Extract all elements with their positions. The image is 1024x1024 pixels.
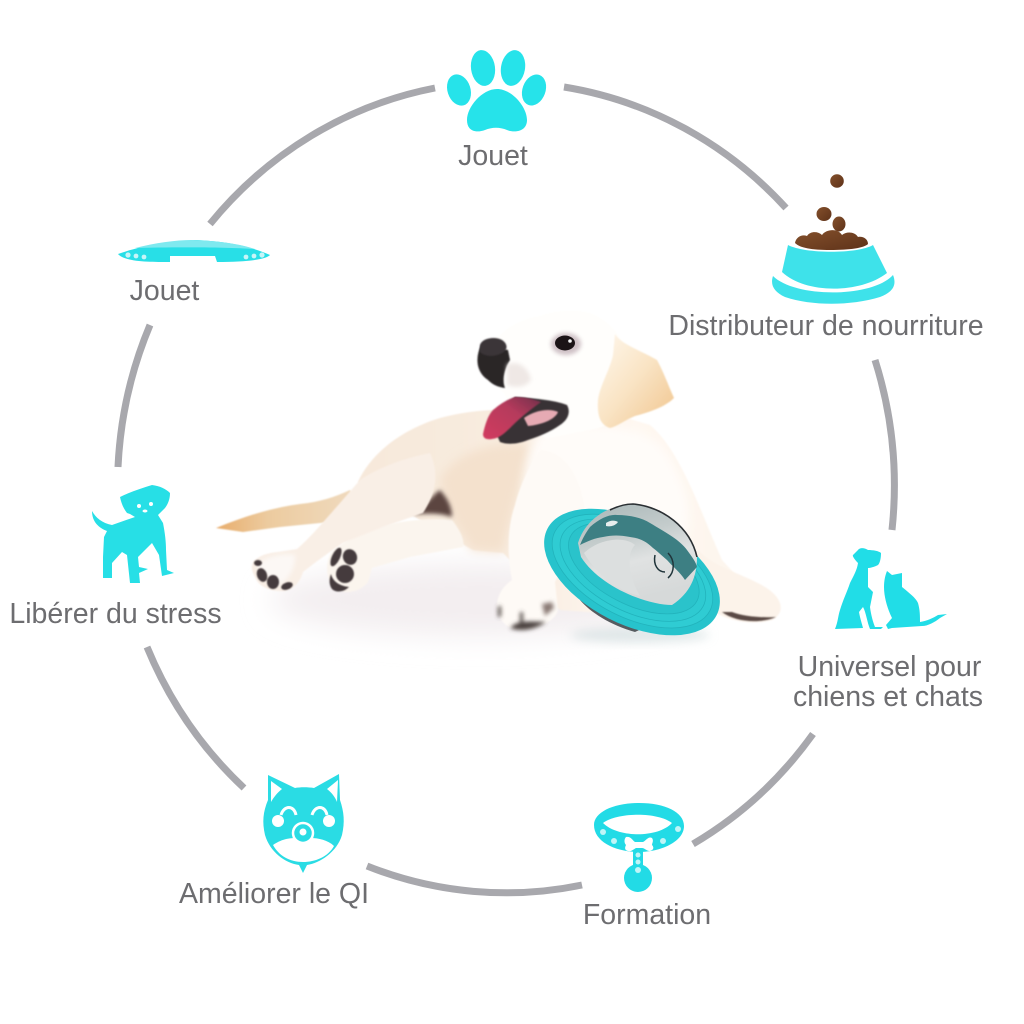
toy shadow xyxy=(570,627,710,643)
label: Améliorer le QI xyxy=(179,878,369,910)
label: Formation xyxy=(583,899,711,931)
whisker patch xyxy=(507,363,531,387)
front paw claws xyxy=(498,602,554,630)
feature: collar and label xyxy=(583,803,711,931)
front leg and paw xyxy=(497,450,585,630)
feature: toy side view and label xyxy=(118,240,270,307)
upper hind leg xyxy=(252,453,435,591)
feature: paw icon and label xyxy=(443,48,550,172)
claw detail in dome xyxy=(655,553,673,578)
back paw claws xyxy=(722,612,776,621)
toy dome xyxy=(578,504,697,605)
ear xyxy=(598,334,674,428)
toy rim xyxy=(524,483,740,661)
inner mouth xyxy=(524,410,558,426)
feature: food bowl and label xyxy=(668,174,984,342)
icon: puppy silhouette xyxy=(92,485,174,583)
paw pads on rear legs xyxy=(254,546,359,591)
chest xyxy=(525,424,689,555)
dome inner band xyxy=(580,515,697,580)
lower hind leg xyxy=(327,519,463,592)
tongue xyxy=(483,397,541,439)
icon: paw xyxy=(443,48,550,131)
icon: flat toy xyxy=(118,240,270,262)
central photo: puppy with toy xyxy=(216,311,781,661)
icon: kibble xyxy=(795,174,868,250)
floor shadow xyxy=(270,564,690,636)
ring of arc segments xyxy=(118,87,894,893)
paw highlight xyxy=(256,554,295,585)
dome upper rim line xyxy=(610,504,697,557)
label: Jouet xyxy=(458,140,528,172)
icon: collar xyxy=(594,803,684,892)
flank shading xyxy=(440,444,530,552)
mouth xyxy=(490,397,569,444)
feature: puppy silhouette and label xyxy=(9,485,222,630)
dome highlight xyxy=(606,521,618,526)
body crease xyxy=(412,490,452,517)
feature: shiba face and label xyxy=(179,774,369,910)
icon: dog and cat silhouette xyxy=(835,548,947,629)
muzzle dark xyxy=(477,345,510,388)
back paw right xyxy=(690,550,781,622)
nose xyxy=(480,338,506,356)
feature: dog and cat and label: chiens et chats xyxy=(793,681,983,713)
label: Libérer du stress xyxy=(9,598,222,630)
floor of dome xyxy=(584,540,640,596)
toy: treat dispenser xyxy=(524,483,740,661)
icon: shiba face xyxy=(263,774,344,873)
puppy tail xyxy=(216,490,365,532)
label: Universel pour xyxy=(798,651,982,683)
icon: bowl xyxy=(772,245,894,304)
label: Distributeur de nourriture xyxy=(668,310,984,342)
label: Jouet xyxy=(130,275,199,307)
eye xyxy=(551,333,581,355)
head xyxy=(482,311,630,438)
toy base underside xyxy=(580,590,650,632)
puppy body xyxy=(358,410,745,620)
feature: dog and cat and label xyxy=(793,548,983,713)
